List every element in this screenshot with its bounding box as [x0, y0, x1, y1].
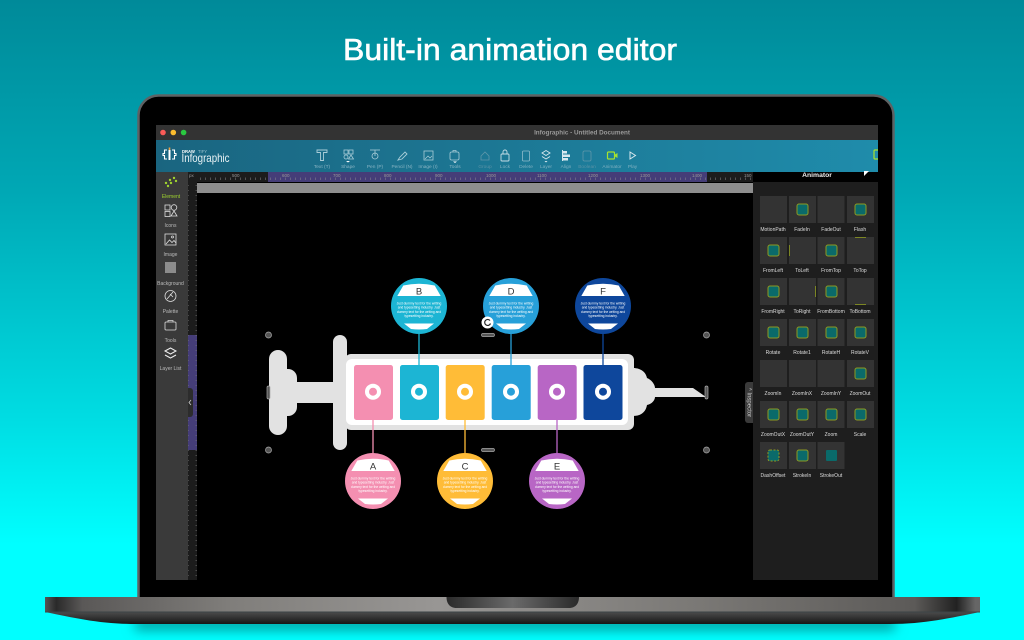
animation cell: FromTop: FromTop [821, 268, 841, 274]
horizontal ruler: 500 [232, 173, 240, 178]
callout C: dummy text for the writing and [443, 485, 487, 489]
callout B [391, 278, 447, 334]
callout E: typesetting industry. [542, 489, 572, 493]
sidebar item: image: Image [164, 252, 178, 258]
horizontal ruler: px [189, 173, 195, 178]
callout E: Just dummy text for the writing [535, 476, 580, 480]
tool: animator [602, 152, 622, 170]
tool: layer: Layer [540, 164, 552, 170]
animation cell: FadeOut: FadeOut [821, 227, 841, 233]
animation cell: Rotate [760, 319, 787, 356]
tool: align [561, 150, 572, 170]
app logo [163, 148, 230, 165]
callout C [437, 453, 493, 509]
animation cell: Flash [847, 196, 874, 233]
callout D: Just dummy text for the writing [489, 302, 534, 306]
callout D: and typesetting industry. Just [490, 306, 532, 310]
horizontal ruler: 800 [384, 173, 392, 178]
tool: pen [367, 150, 384, 170]
animation cell: ToRight [789, 278, 816, 315]
tool: pen: Pen (P) [367, 164, 384, 170]
sidebar item: tools: Tools [165, 338, 177, 344]
animation cell: FromBottom [817, 278, 845, 315]
tool: lock [500, 150, 511, 170]
tool: boolean [578, 151, 596, 170]
callout C: Just dummy text for the writing [443, 476, 488, 480]
title: Built-in animation editor [343, 32, 677, 67]
sidebar item: icons: Icons [165, 223, 177, 229]
title bar [156, 125, 878, 140]
inspector tab: ^ Inspector [746, 388, 752, 417]
tool: shape [341, 150, 355, 170]
horizontal ruler: 1100 [537, 173, 547, 178]
animation cell: DashOffset [760, 442, 787, 479]
artboard top strip [197, 183, 753, 193]
animation cell: DashOffset: DashOffset [761, 473, 786, 479]
animation cell: Scale: Scale [854, 432, 866, 438]
animation cell: ZoomInY [818, 360, 844, 397]
tool: tools: Tools [449, 164, 461, 170]
callout F [575, 278, 631, 334]
animation cell: RotateV: RotateV [851, 350, 870, 356]
callout A: dummy text for the writing and [351, 485, 395, 489]
collapse tab [186, 388, 193, 417]
tool: layer [540, 150, 552, 170]
callout B: typesetting industry. [404, 314, 434, 318]
selection handles [266, 332, 710, 453]
animation cell: Rotate1: Rotate1 [793, 350, 811, 356]
callout E: dummy text for the writing and [535, 485, 579, 489]
animation cell: Zoom: Zoom [825, 432, 837, 438]
animation cell: ToBottom: ToBottom [849, 309, 871, 315]
animation cell: RotateH: RotateH [822, 350, 841, 356]
segment F [584, 365, 622, 420]
tool: lock: Lock [500, 164, 511, 170]
callout C: C [462, 462, 469, 472]
animation cell: FromRight [760, 278, 787, 315]
left sidebar [156, 172, 188, 580]
animation cell: Rotate1 [789, 319, 816, 356]
tool: delete [519, 151, 533, 170]
callout F: and typesetting industry. Just [582, 306, 624, 310]
sidebar item: layer list [160, 348, 182, 372]
laptop base [45, 597, 980, 624]
callout F: F [600, 286, 606, 298]
sidebar item: palette: Palette [163, 309, 178, 315]
animation cell: StrokeOut: StrokeOut [820, 473, 843, 479]
horizontal ruler: 1000 [486, 173, 497, 178]
callout B: and typesetting industry. Just [398, 306, 440, 310]
tool: boolean: Boolean [578, 164, 596, 170]
laptop screen bezel [138, 96, 894, 600]
animation cell: StrokeOut [818, 442, 844, 479]
horizontal ruler: 1200 [588, 173, 599, 178]
horizontal ruler: 150 [744, 173, 752, 178]
animation cell: ToTop [847, 237, 874, 274]
animator header: Animator [802, 172, 832, 179]
animation cell: MotionPath [760, 196, 787, 233]
tool: play: Play [628, 164, 638, 170]
callout F: dummy text for the writing and [581, 310, 625, 314]
app logo: DRAW [182, 149, 195, 154]
tool: align: Align [561, 164, 572, 170]
tool: animator: Animator [602, 164, 622, 170]
horizontal ruler: 1400 [692, 173, 703, 178]
animation cell: ZoomInX: ZoomInX [792, 391, 813, 397]
tool: delete: Delete [519, 164, 533, 170]
animation cell: Scale [847, 401, 874, 438]
application window [156, 125, 878, 580]
animation cell: StrokeIn: StrokeIn [793, 473, 812, 479]
animation cell: ToLeft: ToLeft [795, 268, 809, 274]
animation cell: ZoomOutY: ZoomOutY [790, 432, 815, 438]
callout A: A [370, 462, 377, 472]
sidebar item: palette [163, 290, 178, 315]
sidebar item: layer list: Layer List [160, 366, 182, 372]
callout C: and typesetting industry. Just [444, 481, 486, 485]
segment E [538, 365, 577, 420]
callout C: typesetting industry. [450, 489, 480, 493]
callout A: and typesetting industry. Just [352, 481, 394, 485]
syringe barrel interior [346, 359, 628, 425]
callout E [529, 453, 585, 509]
rotate handle [482, 316, 494, 328]
connector lines [373, 334, 603, 453]
animation cell: ZoomIn: ZoomIn [765, 391, 782, 397]
segment A [354, 365, 393, 420]
horizontal ruler: 700 [333, 173, 341, 178]
callout F: Just dummy text for the writing [581, 302, 626, 306]
animation cell: ZoomInY: ZoomInY [821, 391, 842, 397]
callout B: Just dummy text for the writing [397, 302, 442, 306]
callout B: B [416, 286, 422, 298]
tool: image [418, 151, 438, 170]
animation cell: FromRight: FromRight [761, 309, 785, 315]
callout A: Just dummy text for the writing [351, 476, 396, 480]
callout D: dummy text for the writing and [489, 310, 533, 314]
animation cell: FadeIn [789, 196, 816, 233]
animation cell: FromTop [818, 237, 844, 274]
tool: text [314, 150, 331, 170]
animation cell: MotionPath: MotionPath [760, 227, 786, 233]
animation cell: FromLeft: FromLeft [763, 268, 784, 274]
app logo: TIFY [198, 149, 207, 154]
animation cell: ToRight: ToRight [794, 309, 811, 315]
tool: tools [449, 150, 461, 170]
canvas area [186, 172, 753, 580]
animation cell: ToLeft [789, 237, 816, 274]
animation cell: ZoomOut: ZoomOut [850, 391, 871, 397]
sidebar item: element: Element [162, 194, 181, 200]
animation cell: ToBottom [847, 278, 874, 315]
clipped green tool at right edge [874, 150, 878, 159]
tool: group [478, 152, 492, 170]
sidebar item: background [157, 262, 184, 287]
animation cell: ZoomOutX [760, 401, 787, 438]
vertical ruler [188, 182, 197, 580]
sidebar item: icons [165, 205, 177, 229]
animation cell: RotateH [818, 319, 844, 356]
callout A [345, 453, 401, 509]
animator header [753, 171, 878, 182]
animation cell: ZoomOutX: ZoomOutX [761, 432, 786, 438]
segment D [492, 365, 531, 420]
sidebar item: element [162, 177, 181, 200]
title bar: Infographic - Untitled Document [534, 130, 631, 136]
animation cell: ZoomOutY [789, 401, 816, 438]
horizontal ruler [188, 172, 753, 182]
callout D: D [508, 286, 515, 298]
horizontal ruler: 1300 [640, 173, 651, 178]
callout D: typesetting industry. [496, 314, 526, 318]
tool: group: Group [478, 164, 492, 170]
callout B: dummy text for the writing and [397, 310, 441, 314]
callout D [483, 278, 539, 334]
sidebar item: tools [165, 320, 177, 344]
callout E: E [554, 462, 560, 472]
callout A: typesetting industry. [358, 489, 388, 493]
segment C [446, 365, 485, 420]
animation cell: ZoomInX [789, 360, 816, 397]
callout F: typesetting industry. [588, 314, 618, 318]
tool: image: Image (I) [418, 164, 438, 170]
animation cell: FadeIn: FadeIn [794, 227, 810, 233]
callout E: and typesetting industry. Just [536, 481, 578, 485]
animator panel [753, 171, 878, 580]
sidebar item: background: Background [157, 281, 184, 287]
animation cell: FromBottom: FromBottom [817, 309, 845, 315]
segment B [400, 365, 439, 420]
animation cell: StrokeIn [789, 442, 816, 479]
animation cell: FromLeft [760, 237, 787, 274]
syringe infographic [266, 278, 710, 509]
trackpad notch [446, 597, 579, 608]
tool: shape: Shape [341, 164, 355, 170]
animation cell: ZoomOut [847, 360, 874, 397]
animation cell: ZoomIn [760, 360, 787, 397]
tool: text: Text (T) [314, 164, 331, 170]
syringe body [269, 335, 706, 450]
animation cell: Rotate: Rotate [766, 350, 781, 356]
tool: play [628, 152, 638, 170]
tool: pencil [391, 152, 413, 170]
animation cell: Flash: Flash [854, 227, 866, 233]
animation cell: FadeOut [818, 196, 844, 233]
app logo: Infographic [182, 151, 230, 165]
animation cell: RotateV [847, 319, 874, 356]
toolbar [156, 140, 878, 172]
inspector tab [745, 382, 753, 423]
tool: pencil: Pencil (N) [391, 164, 413, 170]
horizontal ruler: 900 [435, 173, 443, 178]
laptop shadow [135, 618, 895, 630]
horizontal ruler: 600 [282, 173, 290, 178]
animation cell: Zoom [818, 401, 844, 438]
sidebar item: image [164, 234, 178, 258]
animation cell: ToTop: ToTop [853, 268, 867, 274]
